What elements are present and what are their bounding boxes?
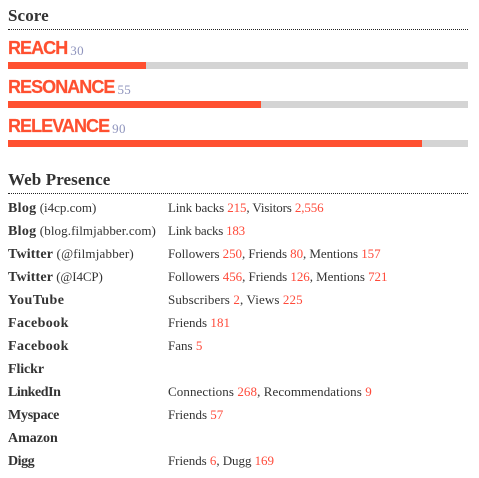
row: Twitter I4CP bbox=[8, 269, 387, 285]
label: Resonance score: RESONANCE55 bbox=[8, 77, 131, 97]
row: YouTube: Subscribers 2, Views 225 bbox=[168, 292, 303, 307]
row: YouTube: YouTube bbox=[8, 293, 64, 308]
row: Blog i4cp.com: Blog (i4cp.com) bbox=[8, 200, 96, 216]
label: Reach score: REACH30 bbox=[8, 38, 84, 58]
row: Twitter filmjabber: Followers 250, Friends 80, Mentions 157 bbox=[168, 246, 381, 261]
row: Facebook friends: Facebook bbox=[8, 316, 69, 331]
row: LinkedIn: Connections 268, Recommendations 9 bbox=[168, 384, 372, 399]
row: Twitter I4CP: Twitter (@I4CP) bbox=[8, 269, 103, 285]
heading: Web Presence: Web Presence bbox=[8, 170, 110, 189]
row: Facebook fans: Facebook bbox=[8, 339, 69, 354]
row: Myspace bbox=[8, 407, 223, 423]
row: LinkedIn: LinkedIn bbox=[8, 385, 60, 400]
row: Facebook friends bbox=[8, 315, 230, 331]
row: Flickr: Flickr bbox=[8, 362, 44, 377]
bar: Resonance bbox=[8, 101, 468, 108]
bar: Reach bbox=[8, 62, 468, 69]
row: Digg: Digg bbox=[8, 454, 34, 469]
row: YouTube bbox=[8, 292, 303, 308]
row: Digg: Friends 6, Dugg 169 bbox=[168, 453, 274, 468]
row: Twitter filmjabber: Twitter (@filmjabber) bbox=[8, 246, 134, 262]
heading: Score: Score bbox=[8, 6, 49, 25]
row: Digg bbox=[8, 453, 274, 469]
row: Blog i4cp.com: Link backs 215, Visitors 2,556 bbox=[168, 200, 323, 215]
row: LinkedIn bbox=[8, 384, 372, 400]
row: Facebook fans: Fans 5 bbox=[168, 338, 202, 353]
bar: Relevance bbox=[8, 140, 468, 147]
row: Twitter filmjabber bbox=[8, 246, 381, 262]
row: Blog i4cp.com bbox=[8, 200, 324, 216]
row: Facebook fans bbox=[8, 338, 202, 354]
label: Relevance score: RELEVANCE90 bbox=[8, 116, 126, 136]
row: Blog filmjabber: Link backs 183 bbox=[168, 223, 245, 238]
row: Twitter I4CP: Followers 456, Friends 126, Mentions 721 bbox=[168, 269, 387, 284]
row: Facebook friends: Friends 181 bbox=[168, 315, 230, 330]
row: Myspace: Myspace bbox=[8, 408, 59, 423]
row: Myspace: Friends 57 bbox=[168, 407, 223, 422]
row: Blog filmjabber bbox=[8, 223, 245, 239]
row: Amazon: Amazon bbox=[8, 431, 58, 446]
row: Blog filmjabber: Blog (blog.filmjabber.com) bbox=[8, 223, 156, 239]
